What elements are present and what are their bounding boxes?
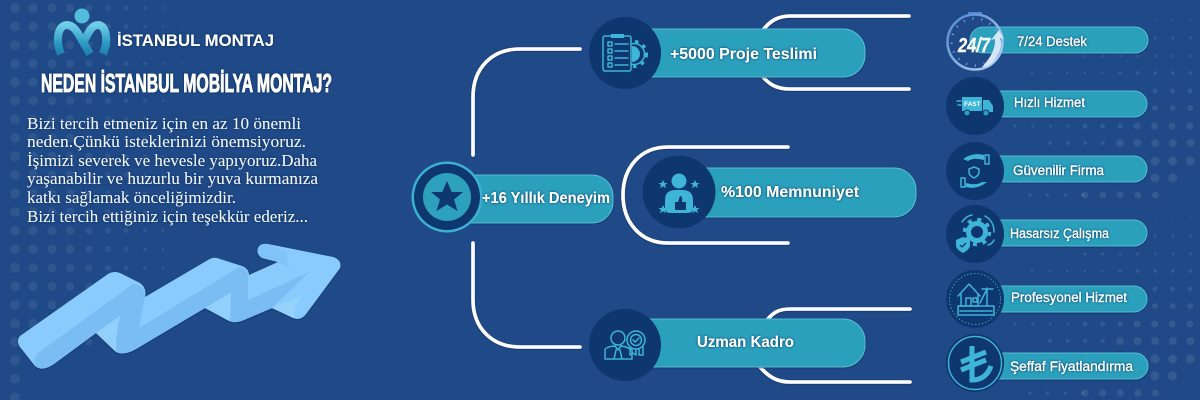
panel: Uzman Kadro: Uzman Kadro [697,334,794,351]
icon: fast truck: FAST [964,101,981,108]
panel: +16 Yıllık Deneyim: +16 Yıllık Deneyim [482,190,610,207]
connector: middle bracket [623,147,788,243]
panel: Hasarsız Çalışma [946,205,1147,263]
panel: 7/24 Destek: 7/24 Destek [1017,34,1087,49]
panel: Hızlı Hizmet [946,77,1147,135]
intro paragraph: neden.Çünkü isteklerinizi önemsiyoruz. [27,132,306,151]
icon: hands and shield [961,154,989,188]
brand name: İSTANBUL MONTAJ [117,31,274,50]
connector: top right branches [762,16,909,89]
icon: gear and shield [956,215,994,253]
connector: bottom right branches [760,309,910,382]
intro paragraph: yaşanabilir ve huzurlu bir yuva kurmanıza [27,169,319,188]
panel: %100 Memnuniyet [642,156,916,228]
icon: 24/7 clock: 24/7 [957,35,991,57]
icon: house [958,284,994,315]
intro paragraph: Bizi tercih ettiğiniz için teşekkür ederiz... [27,207,308,226]
intro paragraph: İşimizi severek ve hevesle yapıyoruz.Daha [27,151,318,170]
logo [58,8,106,54]
panel: Şeffaf Fiyatlandırma [946,334,1148,392]
icon: fast truck [957,97,993,116]
dot pattern right [1015,20,1195,393]
panel: 7/24 Destek [948,12,1148,70]
panel: Hasarsız Çalışma: Hasarsız Çalışma [1010,226,1109,241]
intro paragraph [27,114,319,226]
connector: top to centre [473,49,580,155]
panel: Uzman Kadro [589,309,865,381]
panel: +5000 Proje Teslimi: +5000 Proje Teslimi [670,46,817,63]
icon: 24/7 clock [948,12,1004,70]
panel: +5000 Proje Teslimi [589,17,865,89]
panel: %100 Memnuniyet: %100 Memnuniyet [721,184,860,201]
icon: checklist gear [603,34,646,71]
panel: Güvenilir Firma: Güvenilir Firma [1013,163,1104,178]
icon: star badge [412,162,482,232]
intro paragraph: Bizi tercih etmeniz için en az 10 önemli [27,114,301,133]
icon: lira sign [961,346,991,380]
icon: expert with rosette [605,331,645,359]
icon: person with stars [658,174,700,213]
panel: Güvenilir Firma [946,142,1147,200]
title: NEDEN İSTANBUL MOBİLYA MONTAJ? [41,68,332,98]
dot pattern left [15,8,182,400]
intro paragraph: katkı sağlamak önceliğimizdir. [27,188,236,207]
panel: Şeffaf Fiyatlandırma: Şeffaf Fiyatlandırma [1010,359,1133,374]
growth arrow [18,244,340,369]
panel: Hızlı Hizmet: Hızlı Hizmet [1014,95,1085,110]
panel: Profesyonel Hizmet: Profesyonel Hizmet [1011,290,1127,305]
connector: bottom to centre [473,243,580,347]
panel: Profesyonel Hizmet [946,270,1147,328]
panel: +16 Yıllık Deneyim [412,162,613,232]
